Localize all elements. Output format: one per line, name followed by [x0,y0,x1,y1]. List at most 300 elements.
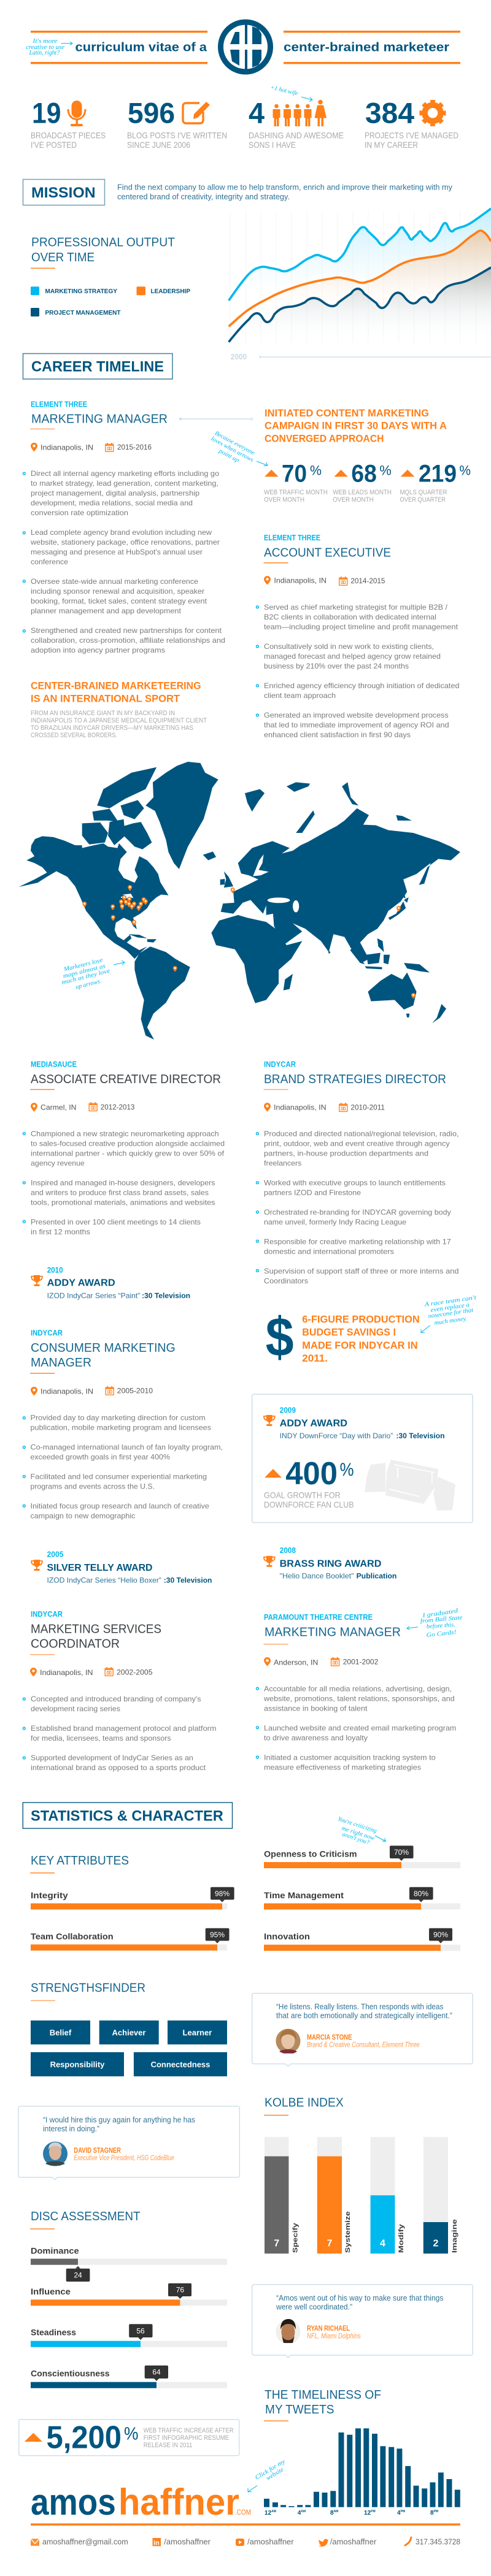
icon: trophy [264,1415,275,1426]
metric: web leads 68%: OVER MONTH [333,496,374,504]
label: SINCE JUNE 2006 [127,140,190,150]
duties: Enriched agency efficiency through initiation of dedicated [264,681,459,690]
note: Ball State: I graduated [422,1608,459,1619]
bar: systemize: 7 [327,2239,333,2249]
job title: ACCOUNT EXECUTIVE [264,546,391,559]
award text: :30 Television [396,1432,444,1440]
portrait [276,2319,300,2344]
duties: Worked with executive groups to launch entitlements [264,1179,446,1187]
duties: for media, licensees, teams and sponsors [31,1734,171,1742]
job title: ASSOCIATE CREATIVE DIRECTOR [31,1073,221,1086]
duties: booking, format, ticket sales, content strategy event [31,597,207,605]
location and dates: Carmel, IN [41,1103,76,1112]
metric: web leads 68%: WEB LEADS MONTH [333,489,392,496]
location and dates: Indianapolis, IN [40,1668,93,1677]
callout: budget savings: MADE FOR INDYCAR IN [302,1340,418,1351]
stat: blog posts: 596 [128,97,175,129]
heading: timeliness of my tweets: THE TIMELINESS OF [265,2388,381,2402]
button: Responsibility [31,2052,124,2076]
tooltip: 64 [152,2368,161,2377]
duties: international brand as opposed to a sports product [31,1763,206,1772]
quote: that are both emotionally and strategically intelligent.” [276,2011,452,2020]
quote: “I would hire this guy again for anything he has [43,2115,195,2124]
tooltip [66,2266,90,2282]
location and dates [30,1667,153,1677]
tooltip [409,1887,433,1902]
bar: conscientiousness 64: Conscientiousness [31,2369,110,2379]
employer: INDYCAR [31,1328,63,1337]
bar: imagine [423,2137,458,2253]
bar: steadiness 56: Steadiness [31,2327,76,2337]
stat: projects [365,97,458,150]
connector [179,418,253,420]
note: race team: much money. [434,1316,468,1327]
bar: imagine: 2 [433,2239,438,2249]
note: race team: even replace a [430,1301,470,1314]
duties: development, media relations, social media and [31,499,193,507]
caption: WEB TRAFFIC INCREASE AFTER [144,2427,234,2434]
duties: business by 210% over the past 24 months [264,662,409,670]
award: 2008 Brass Ring [264,1546,396,1581]
button: Learner [168,2020,227,2044]
label: BLOG POSTS I'VE WRITTEN [127,131,227,140]
tooltip: 70% [394,1848,409,1857]
metric: web traffic 70%: OVER MONTH [264,496,304,504]
note: race team: nosecone for that [428,1307,474,1320]
metric: MQLs 219%: % [459,463,471,478]
tooltip: 24 [74,2271,82,2279]
duties: Co-managed international launch of fan loyalty program, [31,1443,223,1452]
heading: key attributes: KEY ATTRIBUTES [31,1854,129,1868]
attribution: Brand & Creative Consultant, Element Three [307,2041,420,2049]
tooltip [168,2283,191,2299]
metric: web traffic 70%: 70 [282,461,307,488]
metric: 400%: GOAL GROWTH FOR [264,1490,341,1500]
bar: integrity 98% [31,1887,234,1909]
contact: twitter: /amoshaffner [330,2537,377,2546]
bar: modify [371,2137,405,2253]
button: Responsibility: Responsibility [50,2060,105,2069]
stat: sons: 4 [249,97,265,129]
chart axis: 2000 [231,352,247,361]
duties: to sales-focused creative production alongside acclaimed [31,1140,225,1148]
portrait [43,2142,68,2166]
employer: ELEMENT THREE [31,400,87,408]
note: Ball State: Go Cards! [426,1629,457,1639]
duties: print, outdoor, web and event creative through agency [264,1140,450,1148]
award: 2008 Brass Ring: 2008 [280,1546,296,1555]
button: Achiever: Achiever [112,2028,145,2037]
job title: MARKETING SERVICES [31,1623,161,1636]
award: 2008 Brass Ring: Publication [357,1572,396,1581]
bar: modify: 4 [380,2239,385,2249]
tooltip [429,1928,452,1943]
award text: INDY DownForce “Day with Dario” [280,1432,393,1440]
duties: Supported development of IndyCar Series as an [31,1754,193,1762]
hour labels: PM [401,2510,405,2513]
hour labels: AM [301,2510,306,2513]
metric: 400%: DOWNFORCE FAN CLUB [264,1500,354,1509]
duties: Launched website and created email marketing program [264,1723,456,1732]
caption: FROM AN INSURANCE GIANT IN MY BACKYARD IN [31,710,175,717]
award: 2005 Silver Telly: 2005 [47,1551,64,1559]
location and dates: 2014-2015 [350,577,385,585]
bar: influence 76: Influence [31,2287,71,2296]
duties [23,1414,223,1520]
duties: international partner - which quickly grew to over 50% of [31,1149,225,1158]
heading box: mission: MISSION [31,185,96,201]
bar chart: tweets by hour [264,2428,460,2517]
duties: Provided day to day marketing direction for custom [31,1414,206,1422]
icon: race car [365,1460,455,1511]
duties: Produced and directed national/regional television, radio, [264,1130,459,1138]
tooltip: 90% [433,1931,448,1939]
award: 2005 Silver Telly [31,1551,212,1584]
location and dates [264,1103,385,1112]
duties: conversion rate optimization [31,508,128,517]
employer: PARAMOUNT THEATRE CENTRE [264,1613,373,1622]
duties: assistance in booking of talent [264,1704,368,1712]
award: 2008 Brass Ring: BRASS RING AWARD [280,1558,381,1569]
duties [257,1684,456,1771]
button: Learner: Learner [183,2028,212,2037]
stat: projects: 384 [365,97,414,129]
callout: international sport: CENTER-BRAINED MARKETEERING [31,680,201,692]
heading: professional output: PROFESSIONAL OUTPUT [31,236,175,250]
metric: MQLs 219%: MQLS QUARTER [400,489,447,496]
location and dates: 2015-2016 [117,443,152,451]
note: Latin [26,38,72,56]
duties: name unveil, formerly Indy Racing League [264,1218,406,1227]
duties [23,1130,225,1236]
callout: content marketing campaign: INITIATED CONTENT MARKETING [265,407,429,419]
award text [280,1406,444,1440]
caption: FIRST INFOGRAPHIC RESUME [144,2434,229,2442]
callout: content marketing campaign: CONVERGED APPROACH [265,433,384,445]
label: IN MY CAREER [365,140,418,150]
chart legend: MARKETING STRATEGY [45,288,117,295]
duties: and writers to produce first class brand assets, sales [31,1189,209,1197]
logo wordmark: amoshaffner.com: haffner [118,2482,239,2523]
duties: Oversee state-wide annual marketing conference [31,577,198,586]
caption [144,2427,234,2449]
portrait [276,2029,300,2053]
mission statement: Find the next company to allow me to help transform, enrich and improve their marketing with my [117,183,453,191]
duties: client team approach [264,691,336,700]
testimonial: Ryan Richael [252,2285,473,2358]
button: Connectedness [134,2052,227,2076]
caption: RELEASE IN 2011 [144,2442,192,2449]
label [249,131,344,150]
icon: microphone [68,101,85,126]
contact: linkedin: in [153,2539,160,2547]
heading: Kolbe index: KOLBE INDEX [265,2096,344,2110]
tooltip [129,2324,152,2340]
tooltip: 56 [136,2326,145,2335]
duties: measure effectiveness of marketing strategies [264,1763,421,1771]
job: consumer marketing manager [23,1328,223,1520]
heading box: statistics and character [23,1803,233,1828]
hour labels: 4 [397,2510,401,2517]
duties: Direct all internal agency marketing efforts including go [31,469,219,478]
caption [31,710,207,739]
bar: modify: Modify [398,2223,405,2253]
duties: Initiated a customer acquisition tracking system to [264,1753,436,1761]
location and dates [264,1657,379,1666]
duties [23,469,225,654]
icon: family of people [273,100,327,126]
tooltip: 80% [414,1889,428,1898]
label [365,131,458,150]
duties: to drive awareness and loyalty [264,1733,368,1742]
metric: web leads 68% [333,461,392,504]
bar: time management 80%: Time Management [264,1890,344,1900]
callout: international sport [31,680,207,739]
callout: budget savings [266,1307,420,1368]
award text: 2009 [280,1406,296,1414]
duties: partners IZOD and Firestone [264,1189,361,1197]
duties: in first 12 months [31,1228,90,1236]
label [31,131,106,150]
line chart: professional output over time [229,209,491,343]
award: 2008 Brass Ring: "Helio Dance Booklet" [280,1572,354,1581]
award: 2010 Addy: :30 Television [142,1292,190,1300]
quote: interest in doing.” [43,2124,99,2133]
location and dates: Anderson, IN [274,1658,318,1666]
note: Latin: Latin, right? [29,50,60,56]
quote: were well coordinated.” [276,2302,352,2311]
duties: tools, promotional materials, animations and websites [31,1198,215,1207]
callout: budget savings: BUDGET SAVINGS I [302,1327,396,1338]
duties: programs and events across the U.S. [31,1482,155,1491]
metric: web traffic 70% [264,461,328,504]
award: 2010 Addy: 2010 [47,1266,63,1275]
heading box: career timeline [23,353,172,379]
heading: professional output [31,236,175,269]
button: Achiever [99,2020,159,2044]
tooltip: 95% [210,1931,225,1939]
heading box: career timeline: CAREER TIMELINE [31,359,164,375]
bar: imagine: Imagine [451,2219,458,2253]
callout: budget savings: 6-FIGURE PRODUCTION [302,1314,420,1325]
stat: broadcast pieces: 19 [32,97,61,129]
duties: Inspired and managed in-house designers, developers [31,1179,215,1187]
attribution: NFL, Miami Dolphins [307,2332,361,2340]
attribution: Executive Vice President, HSG CodeBlue [74,2153,174,2162]
duties: to market strategy, lead generation, content marketing, [31,479,218,488]
note: criticism [337,1815,386,1846]
bar: systemize [317,2137,352,2253]
tooltip [211,1887,234,1902]
duties: Generated an improved website development process [264,711,449,719]
icon: edit pencil [183,102,210,123]
panel: 5,200% web traffic [19,2420,239,2456]
hour labels: 4 [298,2510,301,2517]
quote [276,2002,452,2020]
metric: MQLs 219%: OVER QUARTER [400,496,446,504]
note: Latin: It's more [32,38,58,45]
award: 2010 Addy: IZOD IndyCar Series “Paint” [47,1292,140,1300]
hour labels: 8 [430,2510,434,2517]
note: maps [61,957,125,991]
stat: broadcast pieces [31,97,106,150]
note: maps: maps almost as [63,963,106,980]
job title: COORDINATOR [31,1638,120,1651]
metric: 400%: % [340,1460,354,1480]
award: 2010 Addy [31,1266,190,1300]
location and dates: Indianapolis, IN [41,443,93,451]
tooltip [390,1846,414,1861]
employer: ELEMENT THREE [264,534,320,542]
location and dates [31,443,152,452]
attribution [307,2324,361,2340]
duties [257,1130,459,1286]
bar: dominance 24: Dominance [31,2245,79,2255]
bar: integrity 98%: Integrity [31,1890,68,1900]
label [127,131,227,150]
location and dates: Indianapolis, IN [41,1387,93,1395]
note: arrows point up [210,430,268,466]
note: race team [421,1294,477,1333]
duties: Coordinators [264,1277,308,1286]
duties: Facilitated and led consumer experiential marketing [31,1473,207,1481]
hour labels: 12 [364,2510,371,2517]
duties: team—including project timeline and profit management [264,623,458,631]
note: click for website: website [265,2466,285,2482]
note: click for website: Click for my [254,2458,287,2482]
metric: web traffic 70%: WEB TRAFFIC MONTH [264,489,328,496]
note: arrows point up: Because everyone [214,430,256,457]
contact: email: amoshaffner@gmail.com [42,2537,128,2546]
label: I'VE POSTED [31,140,77,150]
job title: MARKETING MANAGER [265,1626,401,1639]
duties: enhanced client satisfaction in first 90 days [264,730,411,739]
label: BROADCAST PIECES [31,131,106,140]
location and dates: 2005-2010 [117,1387,153,1395]
duties: domestic and international promoters [264,1248,394,1256]
caption: INDIANAPOLIS TO A JAPANESE MEDICAL EQUIPMENT CLIENT [31,717,207,724]
title right: center-brained marketeer [284,40,449,54]
bar: conscientiousness 64 [31,2366,227,2388]
job title: MARKETING MANAGER [31,412,168,426]
duties: publication, mobile marketing program and licensees [31,1424,211,1432]
duties: website, promotions, talent relations, sponsorships, and [263,1694,455,1703]
location and dates: 2002-2005 [117,1668,153,1677]
job: marketing manager, element three [23,400,225,654]
duties: B2C clients in collaboration with dedicated internal [264,613,436,621]
stat: blog posts [127,97,227,150]
duties: Concepted and introduced branding of company's [31,1695,201,1703]
duties: Established brand management protocol and platform [31,1724,216,1733]
duties: Accountable for all media relations, advertising, design, [264,1684,452,1693]
award: 2005 Silver Telly: IZOD IndyCar Series “Helio Boxer” [47,1576,161,1584]
bar: innovation 90%: Innovation [264,1931,310,1941]
contact: youtube: /amoshaffner [247,2537,294,2546]
duties: managed forecast and helped agency grow retained [264,652,441,661]
duties: Orchestrated re-branding for INDYCAR governing body [264,1208,451,1217]
quote: “Amos went out of his way to make sure that things [276,2293,444,2302]
bar: openness to criticism 70% [264,1846,460,1868]
duties: Lead complete agency brand evolution including new [31,528,212,537]
attribution [74,2146,174,2162]
location and dates [31,1386,153,1396]
note: hot wife: +1 hot wife [269,84,299,97]
duties: freelancers [264,1159,301,1168]
testimonial: David Stagner [18,2106,239,2180]
hour labels: 8 [330,2510,334,2517]
location and dates: Indianapolis, IN [274,1103,327,1112]
attribution: MARCIA STONE [307,2033,352,2042]
duties: adoption into agency partner programs [31,646,165,654]
label: DASHING AND AWESOME [249,131,344,140]
job title [31,1623,161,1651]
panel: 5,200% web traffic: 5,200 [47,2420,122,2456]
location and dates: 2001-2002 [343,1658,379,1666]
bar: time management 80% [264,1887,460,1909]
bar: team collaboration 95% [31,1928,230,1950]
chart legend: PROJECT MANAGEMENT [45,310,120,316]
map pins [82,885,416,999]
heading: strengthsfinder: STRENGTHSFINDER [31,1981,145,1995]
award: 2005 Silver Telly: SILVER TELLY AWARD [47,1563,152,1573]
note: maps: much as they love [61,967,111,986]
duties: messaging and presence at HubSpot's annual user [31,548,203,556]
note: arrows point up: loves when arrows [210,435,255,464]
bar: systemize: Systemize [344,2211,352,2253]
location and dates: 2010-2011 [350,1103,385,1112]
logo wordmark: amoshaffner.com: amos [31,2482,116,2523]
heading box: statistics and character: STATISTICS & CHARACTER [31,1807,223,1824]
tooltip [206,1928,230,1943]
callout: content marketing campaign [265,407,447,445]
job title: BRAND STRATEGIES DIRECTOR [264,1073,446,1086]
duties: agency revenue [31,1159,85,1168]
world map [19,762,460,1040]
note: Latin: creative to use [26,44,65,51]
bar: influence 76 [31,2283,227,2306]
note: maps: up arrows. [75,978,102,991]
bar: dominance 24 [31,2245,227,2282]
duties [23,1695,217,1772]
hour labels: PM [434,2510,438,2513]
note: Ball State [407,1608,463,1639]
duties: including sponsor renewal and acquisition, speaker [31,587,204,596]
award text: ADDY AWARD [280,1419,347,1429]
bar: specify [265,2137,300,2253]
metric: MQLs 219%: 219 [419,461,457,488]
testimonial: Marcia Stone [252,1993,473,2066]
duties: Presented in over 100 client meetings to 14 clients [31,1218,201,1227]
job: associate creative director [23,1060,225,1236]
tooltip [145,2366,168,2381]
mission statement [117,183,453,201]
note: arrows point up: point up [217,447,241,464]
duties: project management, digital analysis, partnership [31,489,199,497]
note: click for website [248,2458,287,2492]
contact: phone: 317.345.3728 [416,2537,460,2546]
bar: innovation 90% [264,1928,460,1951]
location and dates: 2012-2013 [101,1103,135,1111]
hour labels: AM [334,2510,338,2513]
job title: MANAGER [31,1356,91,1370]
job title: CONSUMER MARKETING [31,1341,176,1355]
stat: sons [249,97,344,150]
icon: dollar sign: $ [266,1307,294,1368]
logo wordmark: amoshaffner.com: .COM [235,2508,251,2517]
heading: timeliness of my tweets [264,2388,381,2421]
contact: linkedin: /amoshaffner [164,2537,211,2546]
duties: Responsible for creative marketing relationship with 17 [264,1238,451,1246]
